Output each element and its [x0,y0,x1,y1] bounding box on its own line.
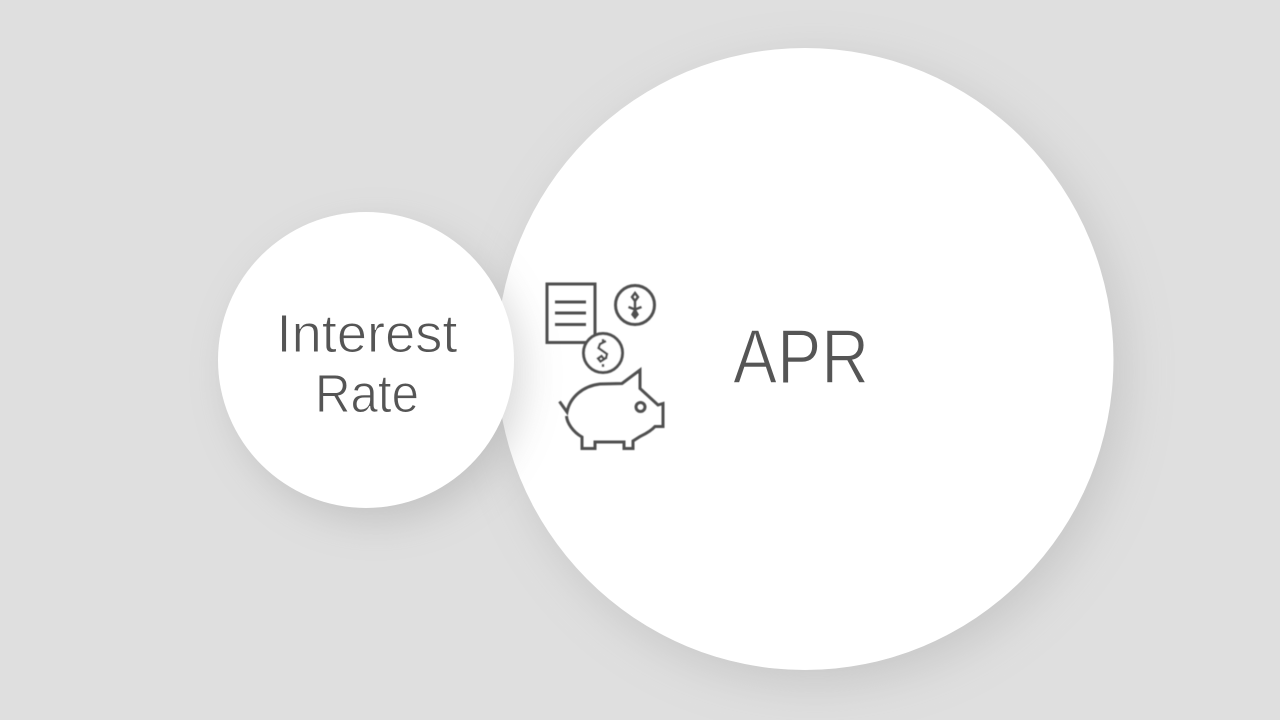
panel: interest rate circle [218,212,522,520]
icon: lower coin [584,334,622,372]
text: Interest Rate: Rate [315,364,419,424]
icon: document, coins and piggy bank [547,284,663,448]
icon: document [547,284,595,342]
text: APR: APR [733,314,869,400]
panel: APR circle [496,48,1121,680]
icon: upper coin [616,286,654,324]
text: Interest Rate [276,304,458,424]
text: Interest Rate: Interest [276,304,458,364]
icon: piggy bank [560,370,663,448]
